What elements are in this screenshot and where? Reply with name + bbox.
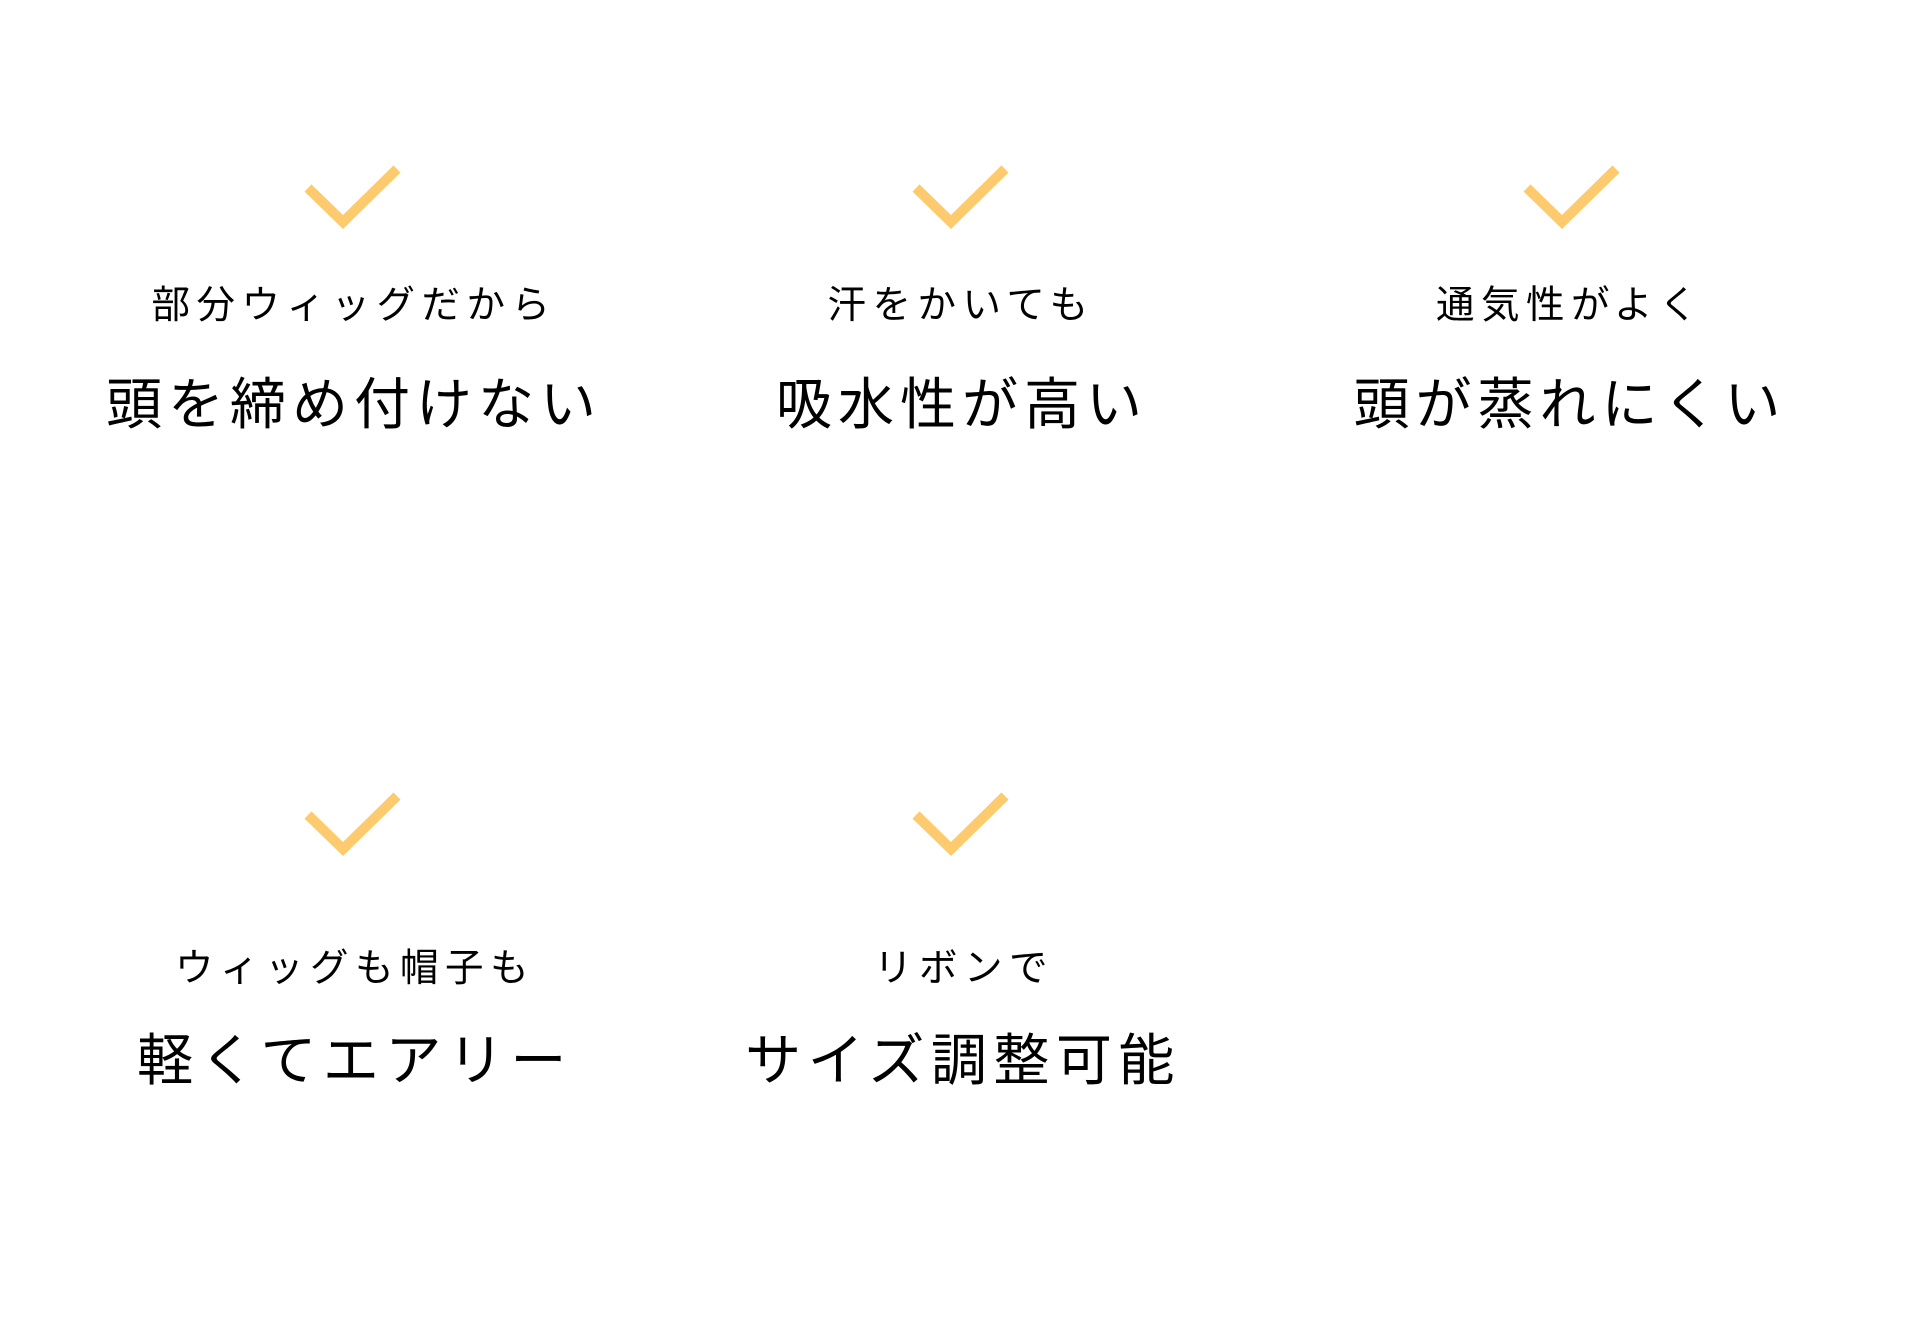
icon: check 5 bbox=[912, 792, 1008, 856]
subheading 4: ウィッグも帽子も bbox=[175, 947, 535, 990]
subheading 3: 通気性がよく bbox=[1436, 284, 1704, 327]
icon: check 2 bbox=[912, 166, 1008, 229]
heading 2: 吸水性が高い bbox=[776, 373, 1148, 436]
icon: check 3 bbox=[1524, 166, 1620, 229]
subheading 5: リボンで bbox=[874, 947, 1054, 990]
heading 1: 頭を締め付けない bbox=[106, 373, 602, 436]
heading 3: 頭が蒸れにくい bbox=[1354, 373, 1786, 436]
subheading 2: 汗をかいても bbox=[828, 284, 1094, 327]
heading 4: 軽くてエアリー bbox=[137, 1029, 573, 1092]
icon: check 1 bbox=[304, 166, 400, 229]
subheading 1: 部分ウィッグだから bbox=[151, 284, 557, 327]
heading 5: サイズ調整可能 bbox=[745, 1029, 1181, 1092]
icon: check 4 bbox=[304, 792, 400, 856]
